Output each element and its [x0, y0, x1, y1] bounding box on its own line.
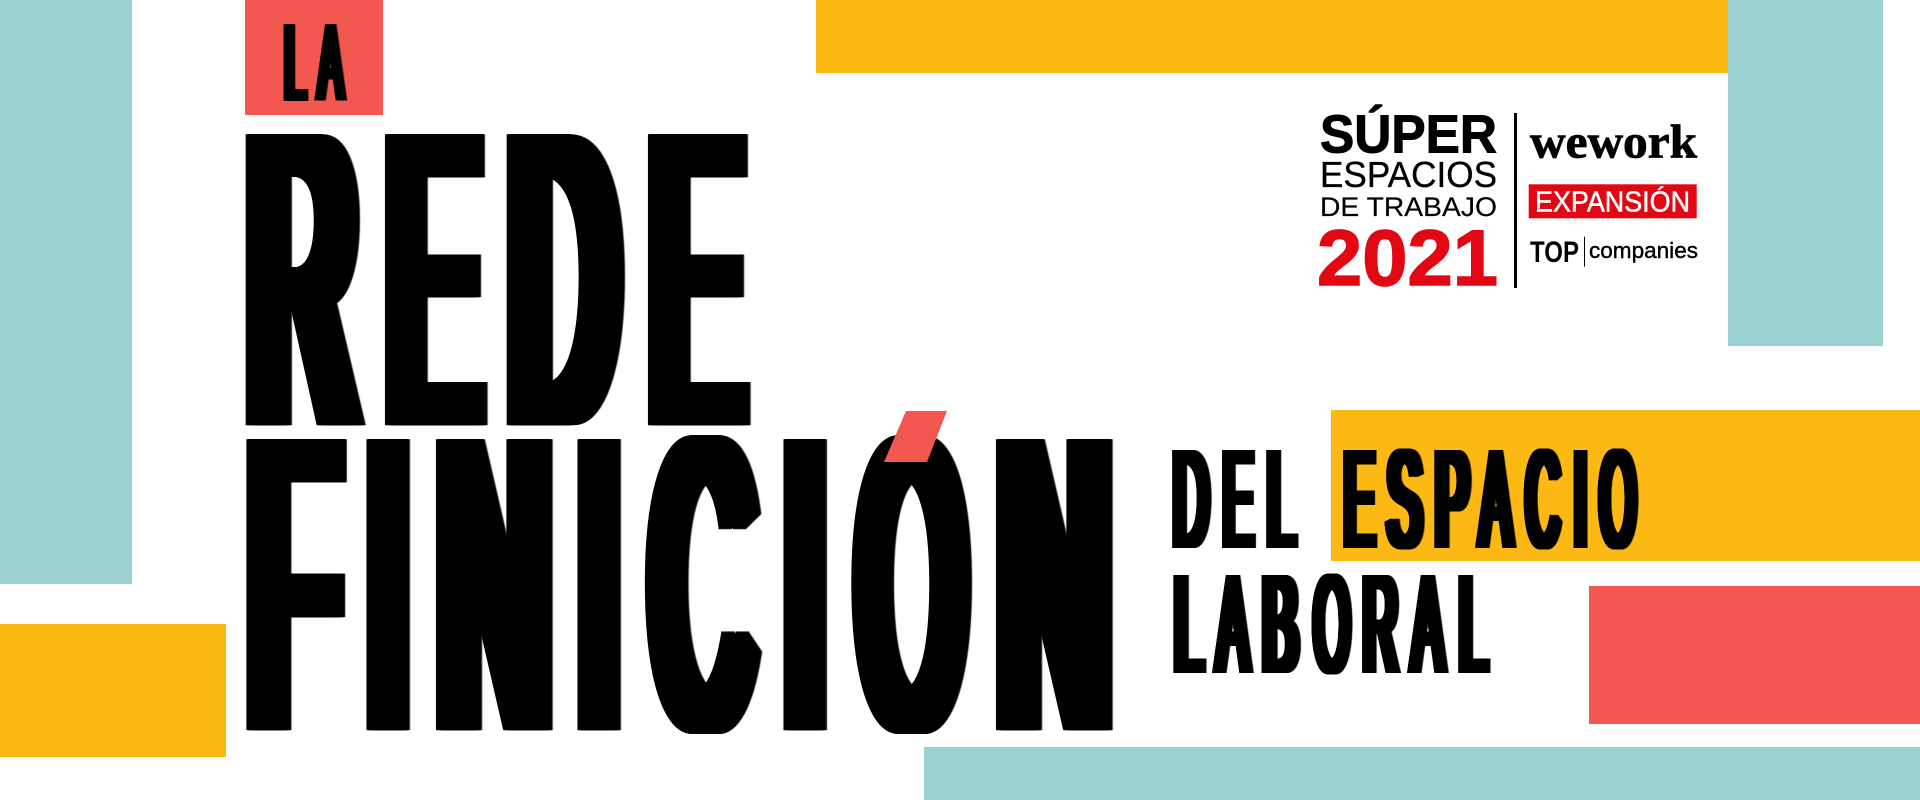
heading: FINICIÓN: F [237, 357, 322, 800]
logo: TOP companies: companies [1589, 238, 1698, 263]
heading: FINICIÓN: N [426, 357, 533, 800]
panel: yellow bottom-left block [0, 624, 226, 757]
heading: ESPACIO: S [1382, 422, 1417, 575]
panel: yellow block behind ESPACIO [1331, 410, 1920, 561]
logo: wework: wework [1530, 116, 1697, 169]
heading: LABORAL: A [1408, 547, 1440, 700]
heading: LABORAL: L [1455, 547, 1482, 700]
heading: ESPACIO: E [1340, 422, 1370, 575]
heading: FINICIÓN: I [356, 357, 393, 800]
panel: teal left block [0, 0, 132, 584]
heading: LA: A [314, 4, 339, 122]
heading: DEL: E [1219, 422, 1249, 575]
heading: LABORAL: A [1213, 547, 1245, 700]
heading: ESPACIO: C [1522, 422, 1556, 575]
panel: coral right block [1589, 586, 1920, 724]
heading: REDE: D [497, 52, 602, 505]
heading: DEL: L [1263, 422, 1290, 575]
heading: LABORAL: L [1170, 547, 1198, 700]
heading: LABORAL: R [1359, 547, 1393, 700]
heading: ESPACIO: I [1570, 422, 1582, 575]
heading: LABORAL: O [1310, 547, 1345, 700]
heading: LA: L [281, 4, 302, 122]
logo: TOP companies: TOP [1530, 236, 1579, 269]
heading: FINICIÓN: N [986, 357, 1093, 800]
logo lockup: Súper Espacios de Trabajo 2021, WeWork, Expansión, Top Companies [1317, 104, 1698, 302]
logo: TOP companies [1530, 236, 1698, 269]
heading: REDE [236, 52, 752, 505]
heading: ESPACIO: O [1596, 422, 1631, 575]
heading: FINICIÓN [237, 357, 1114, 800]
logo divider [1514, 113, 1517, 288]
logo text: 2021: 2021 [1317, 213, 1498, 302]
heading: LABORAL: B [1258, 547, 1294, 700]
logo text: ESPACIOS: ESPACIOS [1320, 154, 1497, 195]
logo text: SÚPER: SÚPER [1320, 105, 1497, 165]
panel: yellow top block [816, 0, 1728, 73]
heading: REDE: R [236, 52, 340, 505]
heading: FINICIÓN: I [773, 357, 810, 800]
heading: DEL: D [1169, 422, 1205, 575]
heading: LA [281, 4, 348, 122]
panel: teal bottom block [924, 747, 1920, 800]
logo text: DE TRABAJO: DE TRABAJO [1320, 192, 1497, 222]
heading: FINICIÓN: I [567, 357, 604, 800]
logo: EXPANSIÓN: EXPANSIÓN [1535, 186, 1690, 219]
heading: FINICIÓN: Ó [847, 357, 950, 800]
heading: ESPACIO [1340, 422, 1639, 575]
heading: ESPACIO: P [1431, 422, 1464, 575]
heading: LABORAL [1170, 547, 1492, 700]
heading: REDE: E [639, 52, 728, 505]
heading: ESPACIO: A [1476, 422, 1508, 575]
panel: teal top-right block [1728, 0, 1883, 346]
heading: FINICIÓN: C [640, 357, 738, 800]
icon: coral accent over the O [884, 411, 947, 462]
heading: REDE: E [376, 52, 465, 505]
heading: DEL [1169, 422, 1300, 575]
panel: coral block behind LA [245, 0, 383, 115]
